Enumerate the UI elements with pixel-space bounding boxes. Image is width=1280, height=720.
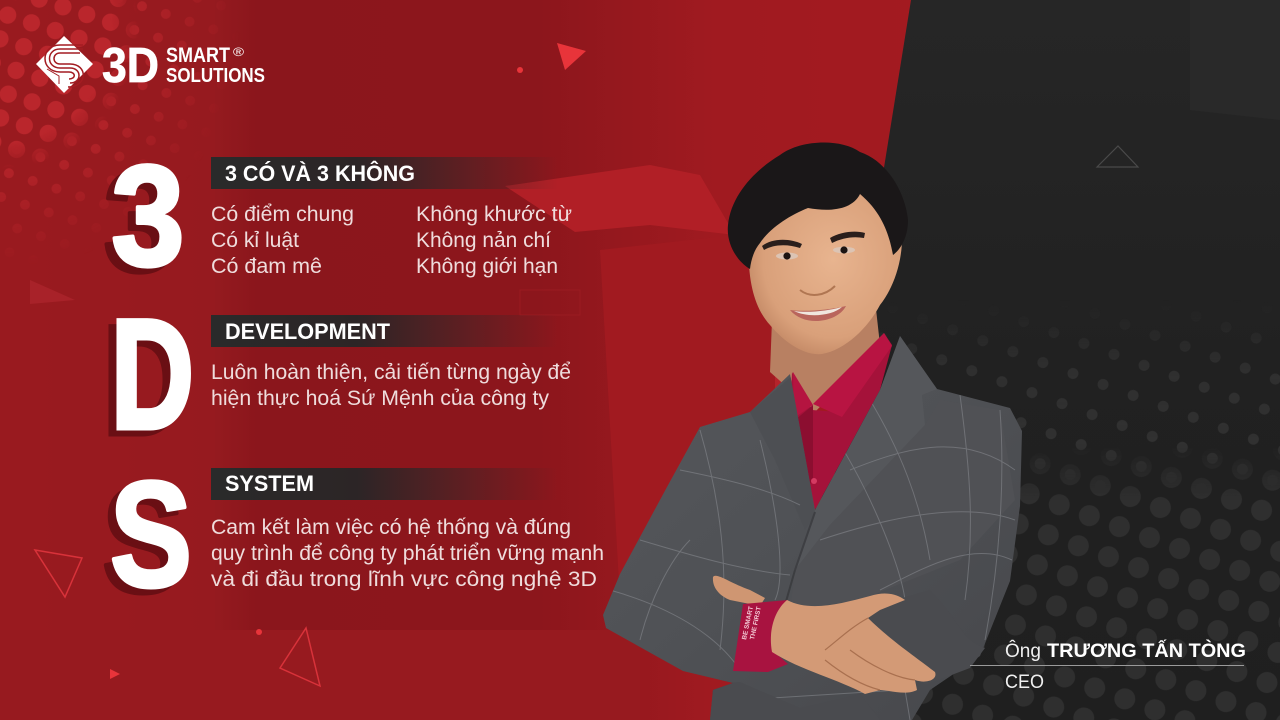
text block: 3 co: Có điểm chung	[211, 203, 354, 226]
cuff	[733, 600, 788, 672]
face	[749, 182, 902, 354]
jacket plaid and lapels	[610, 336, 1015, 720]
text block: 3 co: Có kỉ luật	[211, 229, 299, 252]
big letter S: S	[110, 451, 192, 619]
section heading: 3 co va 3 khong: 3 CÓ VÀ 3 KHÔNG	[225, 161, 415, 186]
text block: system: quy trình để công ty phát triển vững mạnh	[211, 542, 604, 565]
logo icon: striped S diamond	[36, 36, 93, 93]
logo wordmark: 3D	[102, 39, 159, 93]
dark panel	[795, 0, 1280, 720]
section heading: 3 co va 3 khong	[211, 157, 558, 189]
logo: ®	[233, 45, 244, 59]
eyebrows	[762, 232, 865, 250]
caption: name and title	[970, 640, 1246, 693]
logo: SOLUTIONS	[166, 65, 265, 87]
big letter D: D	[103, 294, 186, 468]
decorative triangles and dots	[35, 43, 1138, 686]
text block: development: hiện thực hoá Sứ Mệnh của công ty	[211, 387, 550, 410]
halftone dots top left	[0, 0, 207, 233]
nose	[800, 286, 835, 295]
neck	[770, 300, 880, 412]
cuff: THE FIRST	[749, 606, 763, 640]
eyes	[776, 246, 855, 260]
section heading: development: DEVELOPMENT	[225, 319, 391, 344]
section heading: system: SYSTEM	[225, 471, 314, 496]
big letter 3: 3	[111, 137, 184, 296]
text block: system: Cam kết làm việc có hệ thống và đúng	[211, 516, 571, 539]
text block: 3 khong: Không khước từ	[416, 203, 572, 226]
big letter S: S	[102, 457, 184, 625]
text block: 3 khong	[416, 203, 572, 278]
cuff: BE SMART	[741, 606, 755, 640]
section heading: development	[211, 315, 558, 347]
hair	[728, 143, 908, 269]
fingers shading	[825, 618, 915, 690]
text block: development: Luôn hoàn thiện, cải tiến từng ngày để	[211, 361, 571, 384]
text block: 3 co	[211, 203, 354, 278]
portrait of the CEO	[603, 143, 1022, 720]
text block: 3 khong: Không giới hạn	[416, 255, 558, 278]
section heading: system	[211, 468, 558, 500]
text block: 3 co: Có đam mê	[211, 255, 322, 278]
logo: SMART	[166, 44, 230, 67]
logo	[36, 36, 265, 93]
big letter 3: 3	[103, 143, 176, 302]
shirt collar	[793, 333, 892, 490]
right arm sleeve	[860, 590, 985, 685]
shirt	[790, 333, 892, 515]
right hand	[771, 593, 935, 694]
caption: name and title: Ông	[1005, 640, 1041, 662]
caption: name and title: CEO	[1005, 672, 1044, 693]
big letter D: D	[111, 288, 194, 462]
text block: development	[211, 361, 571, 410]
text block: system	[211, 516, 604, 591]
caption: name and title: TRƯƠNG TẤN TÒNG	[1047, 640, 1246, 662]
left hand behind arm	[713, 576, 765, 606]
shirt button	[811, 478, 817, 484]
text block: 3 khong: Không nản chí	[416, 229, 551, 252]
mouth	[790, 306, 846, 321]
jacket	[603, 336, 1022, 720]
text block: system: và đi đầu trong lĩnh vực công nghệ 3D	[211, 568, 597, 591]
